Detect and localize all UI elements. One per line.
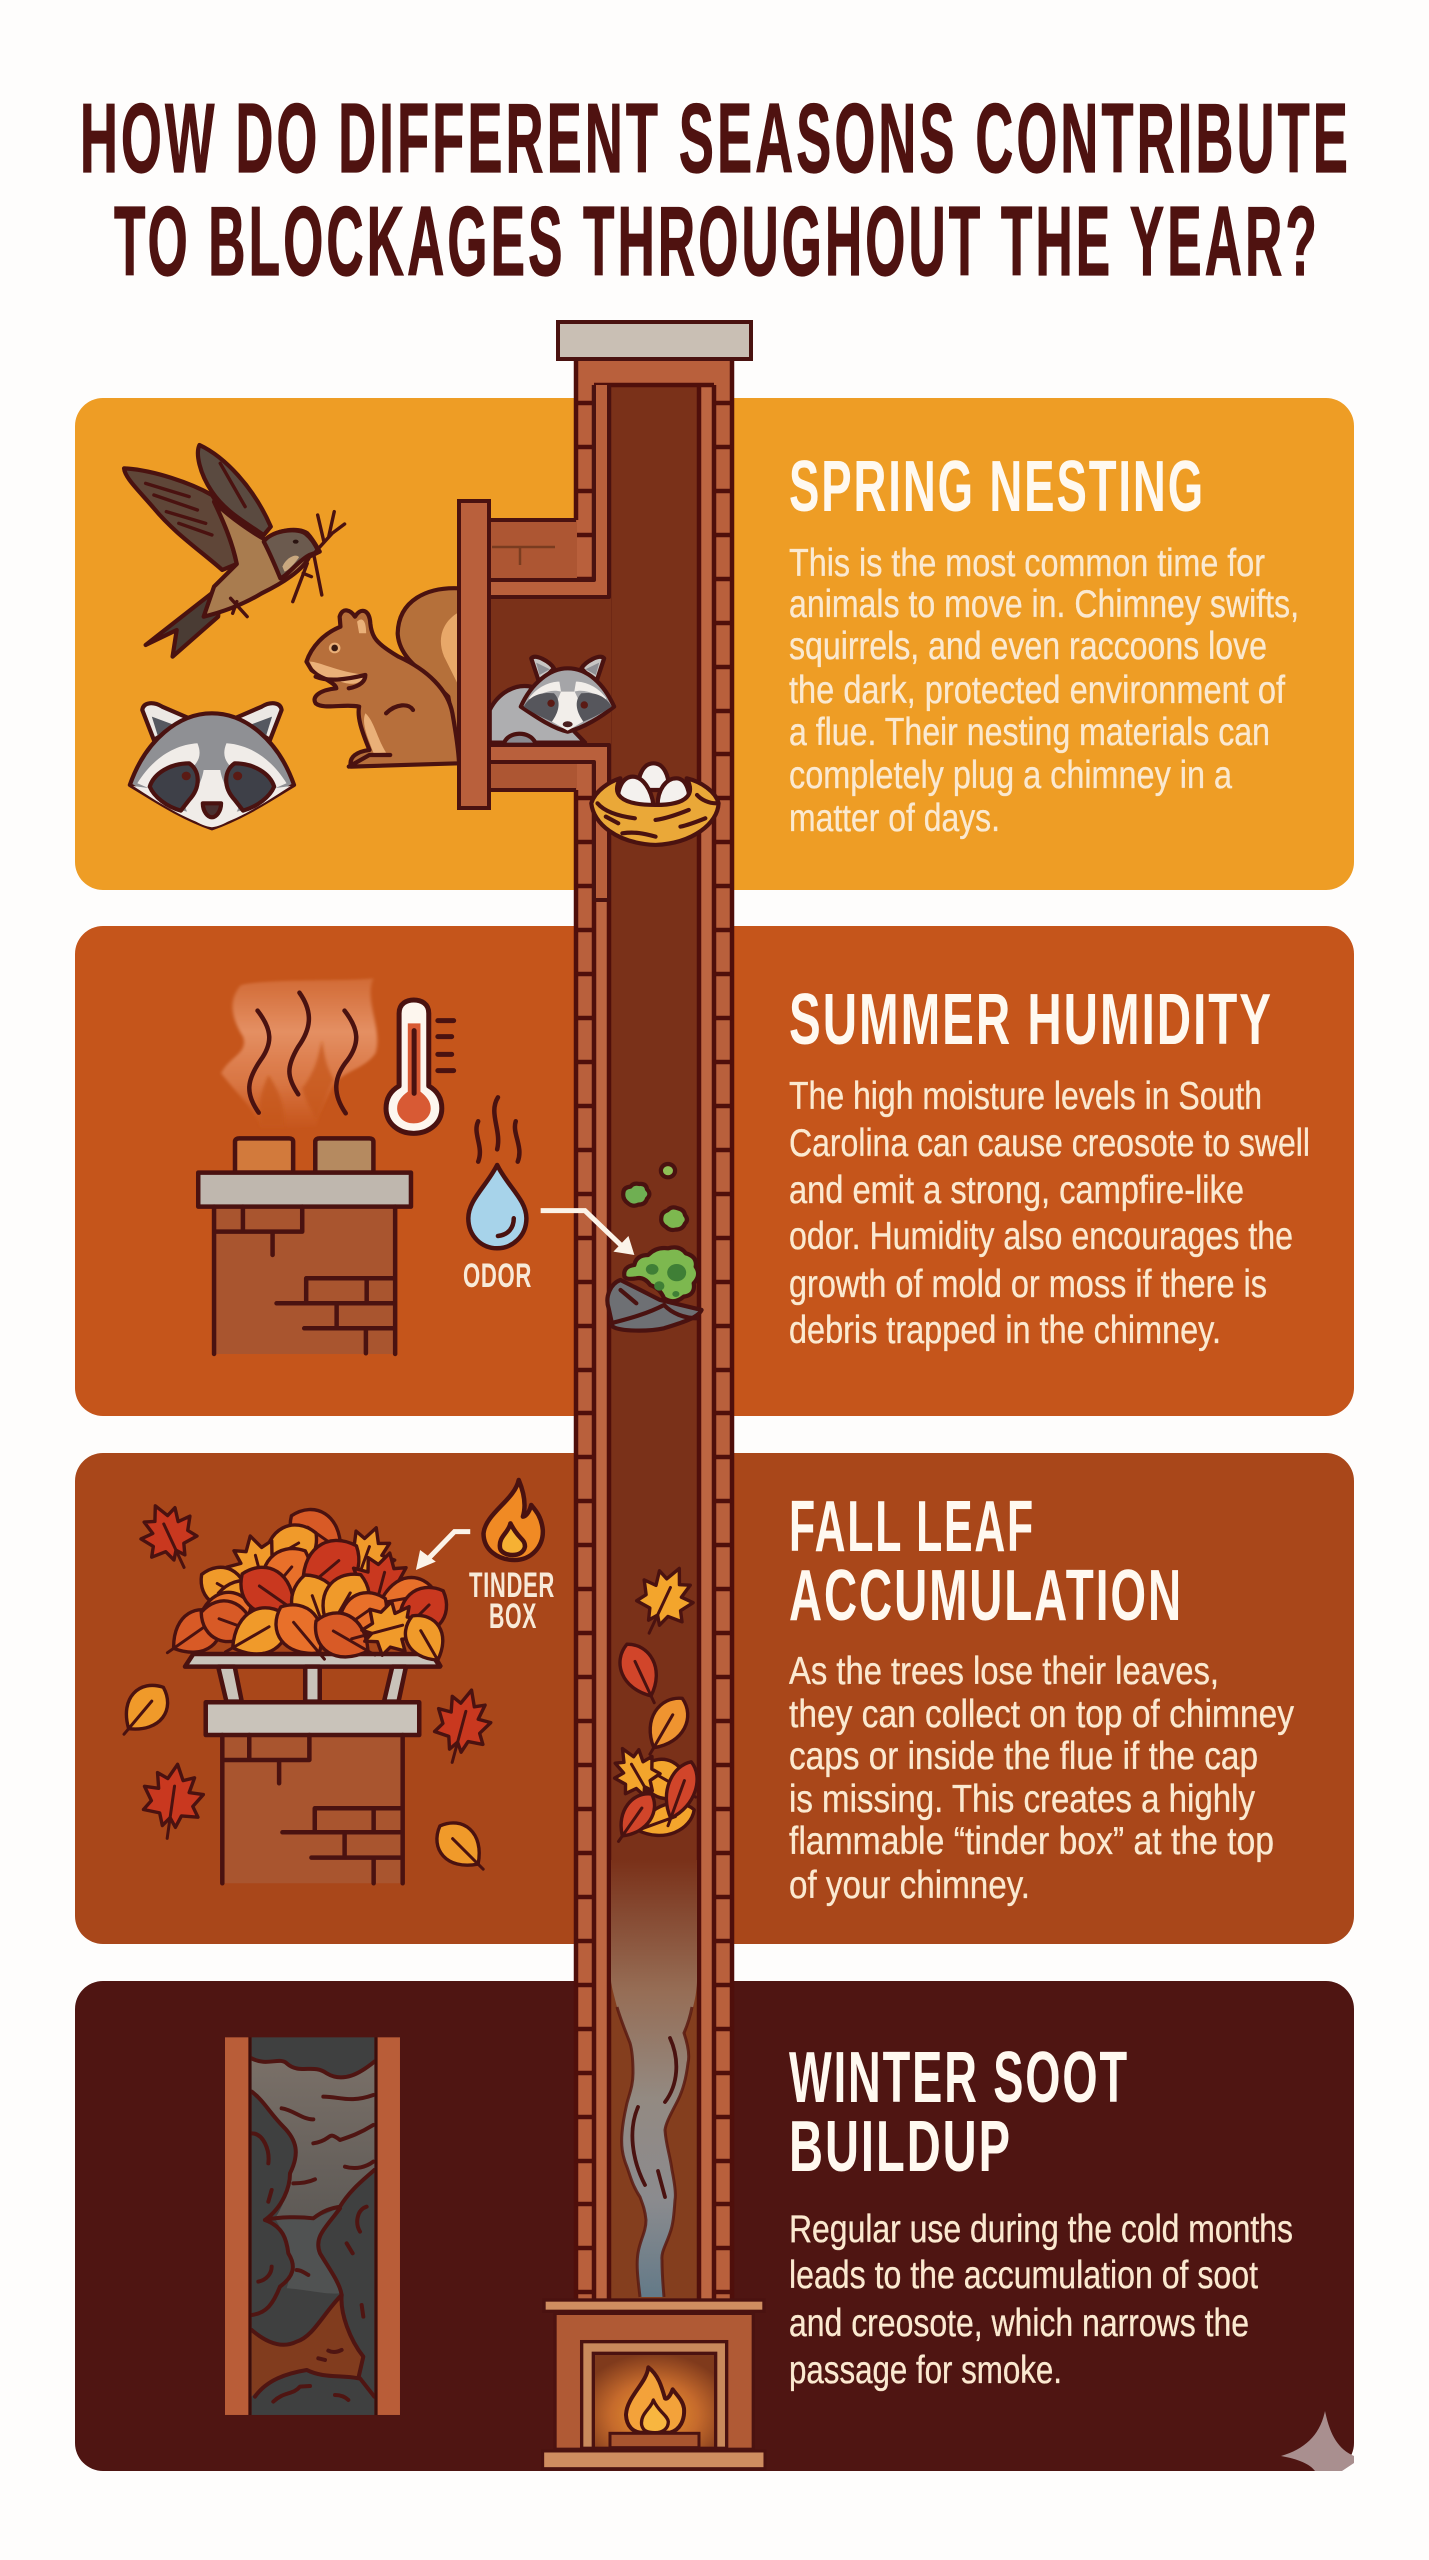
text: summer description [789,1075,1310,1352]
text: spring description [789,542,1299,840]
text: summer description: Carolina can cause creosote to swell [789,1122,1310,1165]
panel: winter soot buildup [75,1981,1354,2471]
heading: winter soot buildup: BUILDUP [789,2107,1012,2187]
chimney cap stone [558,322,751,359]
heading: fall leaf accumulation [789,1487,1183,1636]
text: fall description: of your chimney. [789,1864,1030,1907]
text: spring description: animals to move in. Chimney swifts, [789,583,1299,626]
icon: leaves inside flue [604,1557,705,1849]
hearth log [610,2433,699,2448]
icon: rising steam [221,978,377,1130]
label: tinder box: BOX [489,1597,537,1636]
chimney cross-section [459,322,751,2305]
chimney bricks and flue [576,360,732,2305]
text: spring description: squirrels, and even raccoons love [789,625,1267,668]
label: tinder box: TINDER [469,1566,555,1605]
text: summer description: odor. Humidity also encourages the [789,1215,1293,1258]
heading: winter soot buildup [789,2038,1129,2187]
text: winter description [789,2208,1293,2392]
icon: water drop with odor wisps [468,1097,526,1248]
icon: brick chimney [198,1138,411,1354]
chart: flue cross-section with soot [225,2037,400,2415]
hearth base [543,2451,765,2469]
text: fall description: flammable “tinder box” at the top [789,1820,1274,1863]
text: fall description: they can collect on top of chimney [789,1693,1294,1736]
text: spring description: completely plug a chimney in a [789,754,1232,797]
heading: winter soot buildup: WINTER SOOT [789,2038,1129,2118]
heading: fall leaf accumulation: ACCUMULATION [789,1556,1183,1636]
icon: raccoon in chimney [490,657,614,743]
panel: fall leaf accumulation [75,1453,1354,1944]
smoke rising through flue [611,1860,697,2297]
icon: squirrel [306,588,460,767]
firebox [582,2342,727,2448]
label: odor: ODOR [463,1257,532,1295]
panel: spring nesting [75,398,1354,890]
text: spring description: a flue. Their nesting materials can [789,711,1270,754]
title [80,83,1351,296]
text: winter description: leads to the accumulation of soot [789,2254,1258,2297]
icon: sparkle watermark [1281,2411,1354,2471]
text: spring description: matter of days. [789,797,1000,840]
icon: loose falling leaves [110,1494,498,1883]
fireplace surround [555,2313,753,2449]
text: fall description: As the trees lose their leaves, [789,1650,1219,1693]
side opening in chimney [459,385,611,900]
icon: bird carrying twigs [124,445,345,657]
text: summer description: debris trapped in the chimney. [789,1309,1221,1352]
text: summer description: growth of mold or moss if there is [789,1263,1267,1306]
arrow: flame to leaf pile [416,1532,470,1570]
icon: flame [484,1480,543,1560]
text: winter description: Regular use during the cold months [789,2208,1293,2251]
text: summer description: The high moisture levels in South [789,1075,1262,1118]
text: winter description: passage for smoke. [789,2349,1062,2392]
icon: fire [626,2367,684,2433]
text: summer description: and emit a strong, campfire-like [789,1169,1244,1212]
icon: raccoon head [130,703,294,828]
heading: fall leaf accumulation: FALL LEAF [789,1487,1035,1567]
icon: pile of leaves [156,1499,458,1675]
icon: thermometer [386,1000,454,1133]
icon: nest with eggs [591,763,719,845]
fireplace [543,2300,765,2469]
label: tinder box [469,1566,555,1636]
text: fall description [789,1650,1294,1907]
text: fall description: is missing. This creates a highly [789,1778,1255,1821]
mantel shelf [544,2300,764,2311]
text: fall description: caps or inside the flue if the cap [789,1735,1258,1778]
heading: spring nesting: SPRING NESTING [789,447,1205,527]
arrow: drop to mold [541,1211,634,1255]
panel: summer humidity [75,926,1354,1416]
text: winter description: and creosote, which narrows the [789,2302,1249,2345]
icon: mold spores and debris [607,1164,702,1331]
text: spring description: the dark, protected environment of [789,669,1285,712]
icon: chimney with cap [185,1654,440,1883]
text: spring description: This is the most common time for [789,542,1265,585]
